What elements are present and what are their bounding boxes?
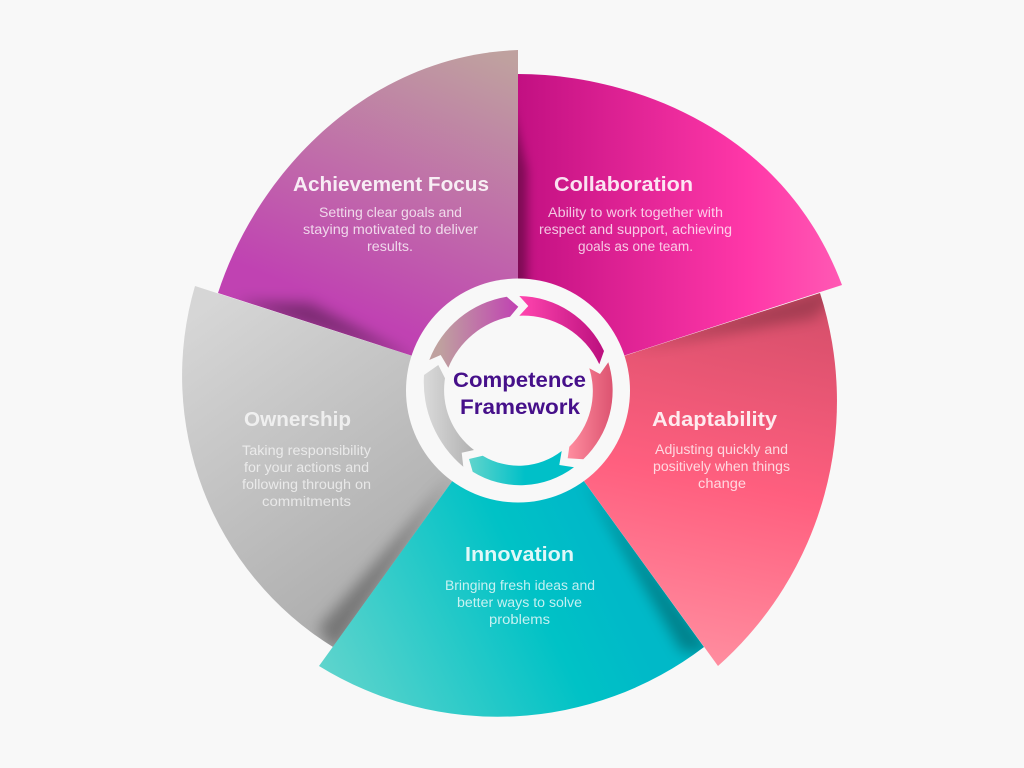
panel: ownership: for your actions and <box>244 460 369 475</box>
arrow: ownership <box>424 365 474 467</box>
panel: innovation: Bringing fresh ideas and <box>445 578 595 593</box>
panel: ownership: commitments <box>262 494 351 509</box>
panel: achievement focus: results. <box>367 239 413 254</box>
panel: adaptability: Adaptability <box>652 409 778 431</box>
center title: Framework <box>460 396 580 419</box>
panel: innovation: better ways to solve <box>457 595 582 610</box>
panel: innovation: Innovation <box>465 544 574 566</box>
panel: adaptability: change <box>698 476 746 491</box>
panel: collaboration: goals as one team. <box>578 239 693 254</box>
panel: achievement focus <box>218 50 518 356</box>
panel: collaboration: Ability to work together with <box>548 205 723 220</box>
panel: innovation: problems <box>489 612 550 627</box>
panel: collaboration: Collaboration <box>554 174 693 196</box>
panel: ownership <box>182 286 452 647</box>
center title: Competence <box>453 369 586 392</box>
arrow: adaptability <box>568 362 613 459</box>
panel: adaptability <box>584 293 837 666</box>
panel: collaboration <box>518 74 842 356</box>
panel: collaboration: respect and support, achieving <box>539 222 732 237</box>
panel: achievement focus: Setting clear goals and <box>319 205 462 220</box>
arrow: innovation <box>469 451 574 485</box>
panel: achievement focus: staying motivated to deliver <box>303 222 479 237</box>
panel: innovation <box>319 481 704 717</box>
panel: ownership: Ownership <box>244 409 351 431</box>
panel: achievement focus: Achievement Focus <box>293 174 489 196</box>
arrow: collaboration <box>519 296 604 364</box>
arrow: achievement focus <box>429 297 518 368</box>
panel: ownership: following through on <box>242 477 371 492</box>
center title <box>453 369 586 419</box>
panel: adaptability: Adjusting quickly and <box>655 442 788 457</box>
center ring <box>406 278 630 502</box>
panel: adaptability: positively when things <box>653 459 790 474</box>
panel: ownership: Taking responsibility <box>242 443 371 458</box>
infographic: competence framework wheel <box>182 50 842 717</box>
